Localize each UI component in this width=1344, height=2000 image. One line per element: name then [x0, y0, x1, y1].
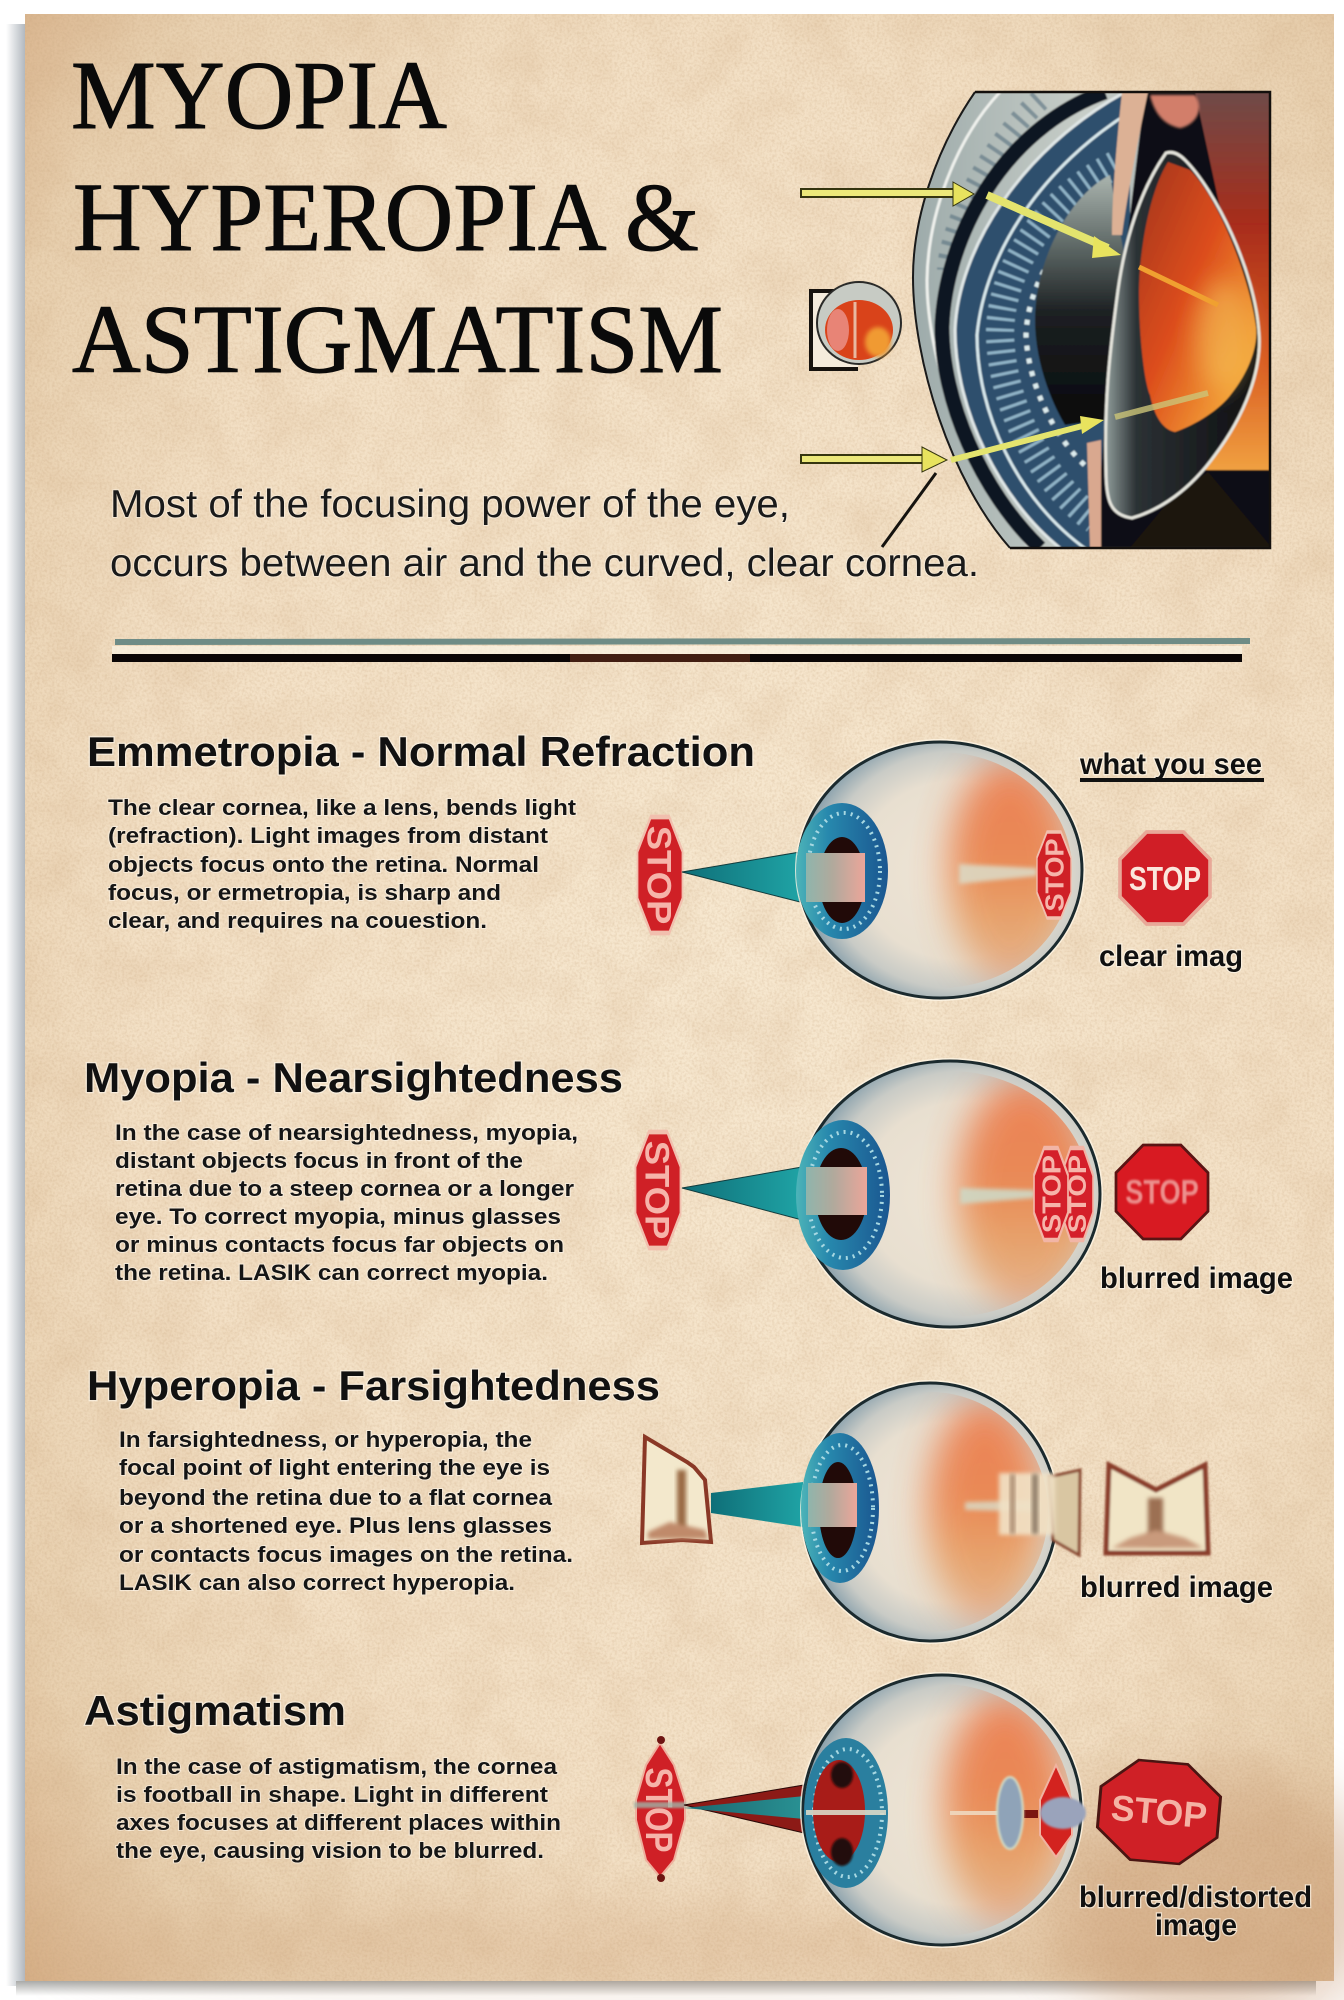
arrow: lower light ray — [801, 393, 1208, 472]
body text: emmetropia: (refraction). Light images from distant — [108, 823, 549, 848]
section: myopia — [84, 1054, 1293, 1330]
body text: myopia: retina due to a steep cornea or a longer — [115, 1176, 574, 1201]
label: blurred image: blurred image — [1080, 1571, 1273, 1604]
retina image: stop with blur ovals — [997, 1765, 1086, 1857]
heading: hyperopia: Hyperopia - Farsightedness — [87, 1362, 660, 1409]
icon: distorted stop sign — [634, 1736, 686, 1882]
body text: myopia: distant objects focus in front of the — [115, 1148, 523, 1173]
heading: astigmatism: Astigmatism — [84, 1687, 346, 1734]
light cone — [711, 1482, 803, 1527]
label: clear image: clear imag — [1099, 940, 1243, 973]
body text: hyperopia: or a shortened eye. Plus lens glasses — [119, 1513, 552, 1538]
cornea cross-section illustration — [801, 90, 1275, 552]
intro text — [110, 483, 979, 585]
intro text: occurs between air and the curved, clear cornea. — [110, 542, 979, 585]
body text: myopia: or minus contacts focus far objects on — [115, 1232, 564, 1257]
body text: astigmatism: the eye, causing vision to be blurred. — [116, 1838, 544, 1863]
body text: myopia: eye. To correct myopia, minus glasses — [115, 1204, 561, 1229]
body text: hyperopia: beyond the retina due to a flat cornea — [119, 1485, 553, 1510]
eye diagram: hyperopia — [800, 1380, 1080, 1644]
body text: hyperopia: In farsightedness, or hyperopia, the — [119, 1427, 532, 1452]
body text: emmetropia: objects focus onto the retina. Normal — [108, 852, 539, 877]
label: what you see: what you see — [1079, 748, 1262, 781]
title: HYPEROPIA & — [73, 164, 699, 271]
body text: myopia: In the case of nearsightedness, myopia, — [115, 1120, 578, 1145]
light cone: red and teal — [684, 1785, 815, 1833]
retina image: doubled stop: STOP — [1063, 1155, 1091, 1233]
label: blurred distorted image: image — [1155, 1909, 1237, 1942]
icon: blurred stop sign — [1116, 1145, 1208, 1239]
icon: distorted stop sign large — [1095, 1757, 1223, 1867]
body text: hyperopia: or contacts focus images on the retina. — [119, 1542, 573, 1567]
body text: myopia: the retina. LASIK can correct myopia. — [115, 1260, 548, 1285]
arrow: upper light ray — [801, 182, 1218, 305]
label: blurred distorted image — [1079, 1881, 1312, 1942]
body text: emmetropia: The clear cornea, like a lens, bends light — [108, 795, 577, 820]
title: MYOPIA — [71, 42, 447, 149]
icon: clear stop sign — [1120, 832, 1210, 924]
small eye thumbnail — [811, 282, 901, 369]
section: astigmatism — [84, 1672, 1312, 1948]
body text: astigmatism: axes focuses at different places within — [116, 1810, 561, 1835]
title: ASTIGMATISM — [72, 286, 723, 393]
body text: astigmatism — [116, 1754, 561, 1863]
icon: distorted stop sign: STOP — [638, 1768, 680, 1852]
retina image: book — [999, 1470, 1080, 1555]
body text: hyperopia: LASIK can also correct hyperopia. — [119, 1570, 515, 1595]
light cone — [682, 852, 800, 902]
body text: hyperopia: focal point of light entering the eye is — [119, 1455, 550, 1480]
icon: blurred stop sign: STOP — [1125, 1174, 1199, 1211]
icon: distorted stop sign large: STOP — [1109, 1788, 1209, 1836]
retina image: doubled stop: STOP — [1037, 1155, 1066, 1233]
body text: emmetropia: focus, or ermetropia, is sharp and — [108, 880, 501, 905]
label: blurred image: blurred image — [1100, 1262, 1293, 1295]
body text: myopia — [115, 1120, 578, 1285]
eye diagram: emmetropia — [795, 739, 1085, 1001]
heading: myopia: Myopia - Nearsightedness — [84, 1054, 623, 1101]
retina image: doubled stop — [1034, 1148, 1093, 1240]
body text: emmetropia — [108, 795, 577, 933]
body text: astigmatism: In the case of astigmatism, the cornea — [116, 1754, 558, 1779]
heading: emmetropia: Emmetropia - Normal Refraction — [87, 728, 755, 775]
icon: distant book — [642, 1437, 711, 1543]
title — [71, 42, 723, 393]
intro text: Most of the focusing power of the eye, — [110, 483, 790, 526]
eye diagram: myopia — [796, 1058, 1103, 1330]
label: blurred distorted image: blurred/distorted — [1079, 1881, 1312, 1914]
icon: distant stop sign: STOP — [638, 1141, 676, 1239]
eye diagram: astigmatism — [800, 1672, 1086, 1948]
icon: clear stop sign: STOP — [1129, 860, 1201, 897]
section: emmetropia — [87, 728, 1264, 1001]
section: hyperopia — [87, 1362, 1273, 1644]
body text: hyperopia — [119, 1427, 573, 1595]
light cone — [682, 1167, 802, 1220]
body text: astigmatism: is football in shape. Light in different — [116, 1782, 549, 1807]
pointer line to cornea — [882, 473, 936, 547]
icon: blurred book — [1106, 1465, 1208, 1553]
divider lines — [112, 638, 1250, 662]
retina image: inverted stop: STOP — [1040, 838, 1069, 912]
icon: distant stop sign: STOP — [640, 826, 678, 924]
body text: emmetropia: clear, and requires na couestion. — [108, 908, 487, 933]
